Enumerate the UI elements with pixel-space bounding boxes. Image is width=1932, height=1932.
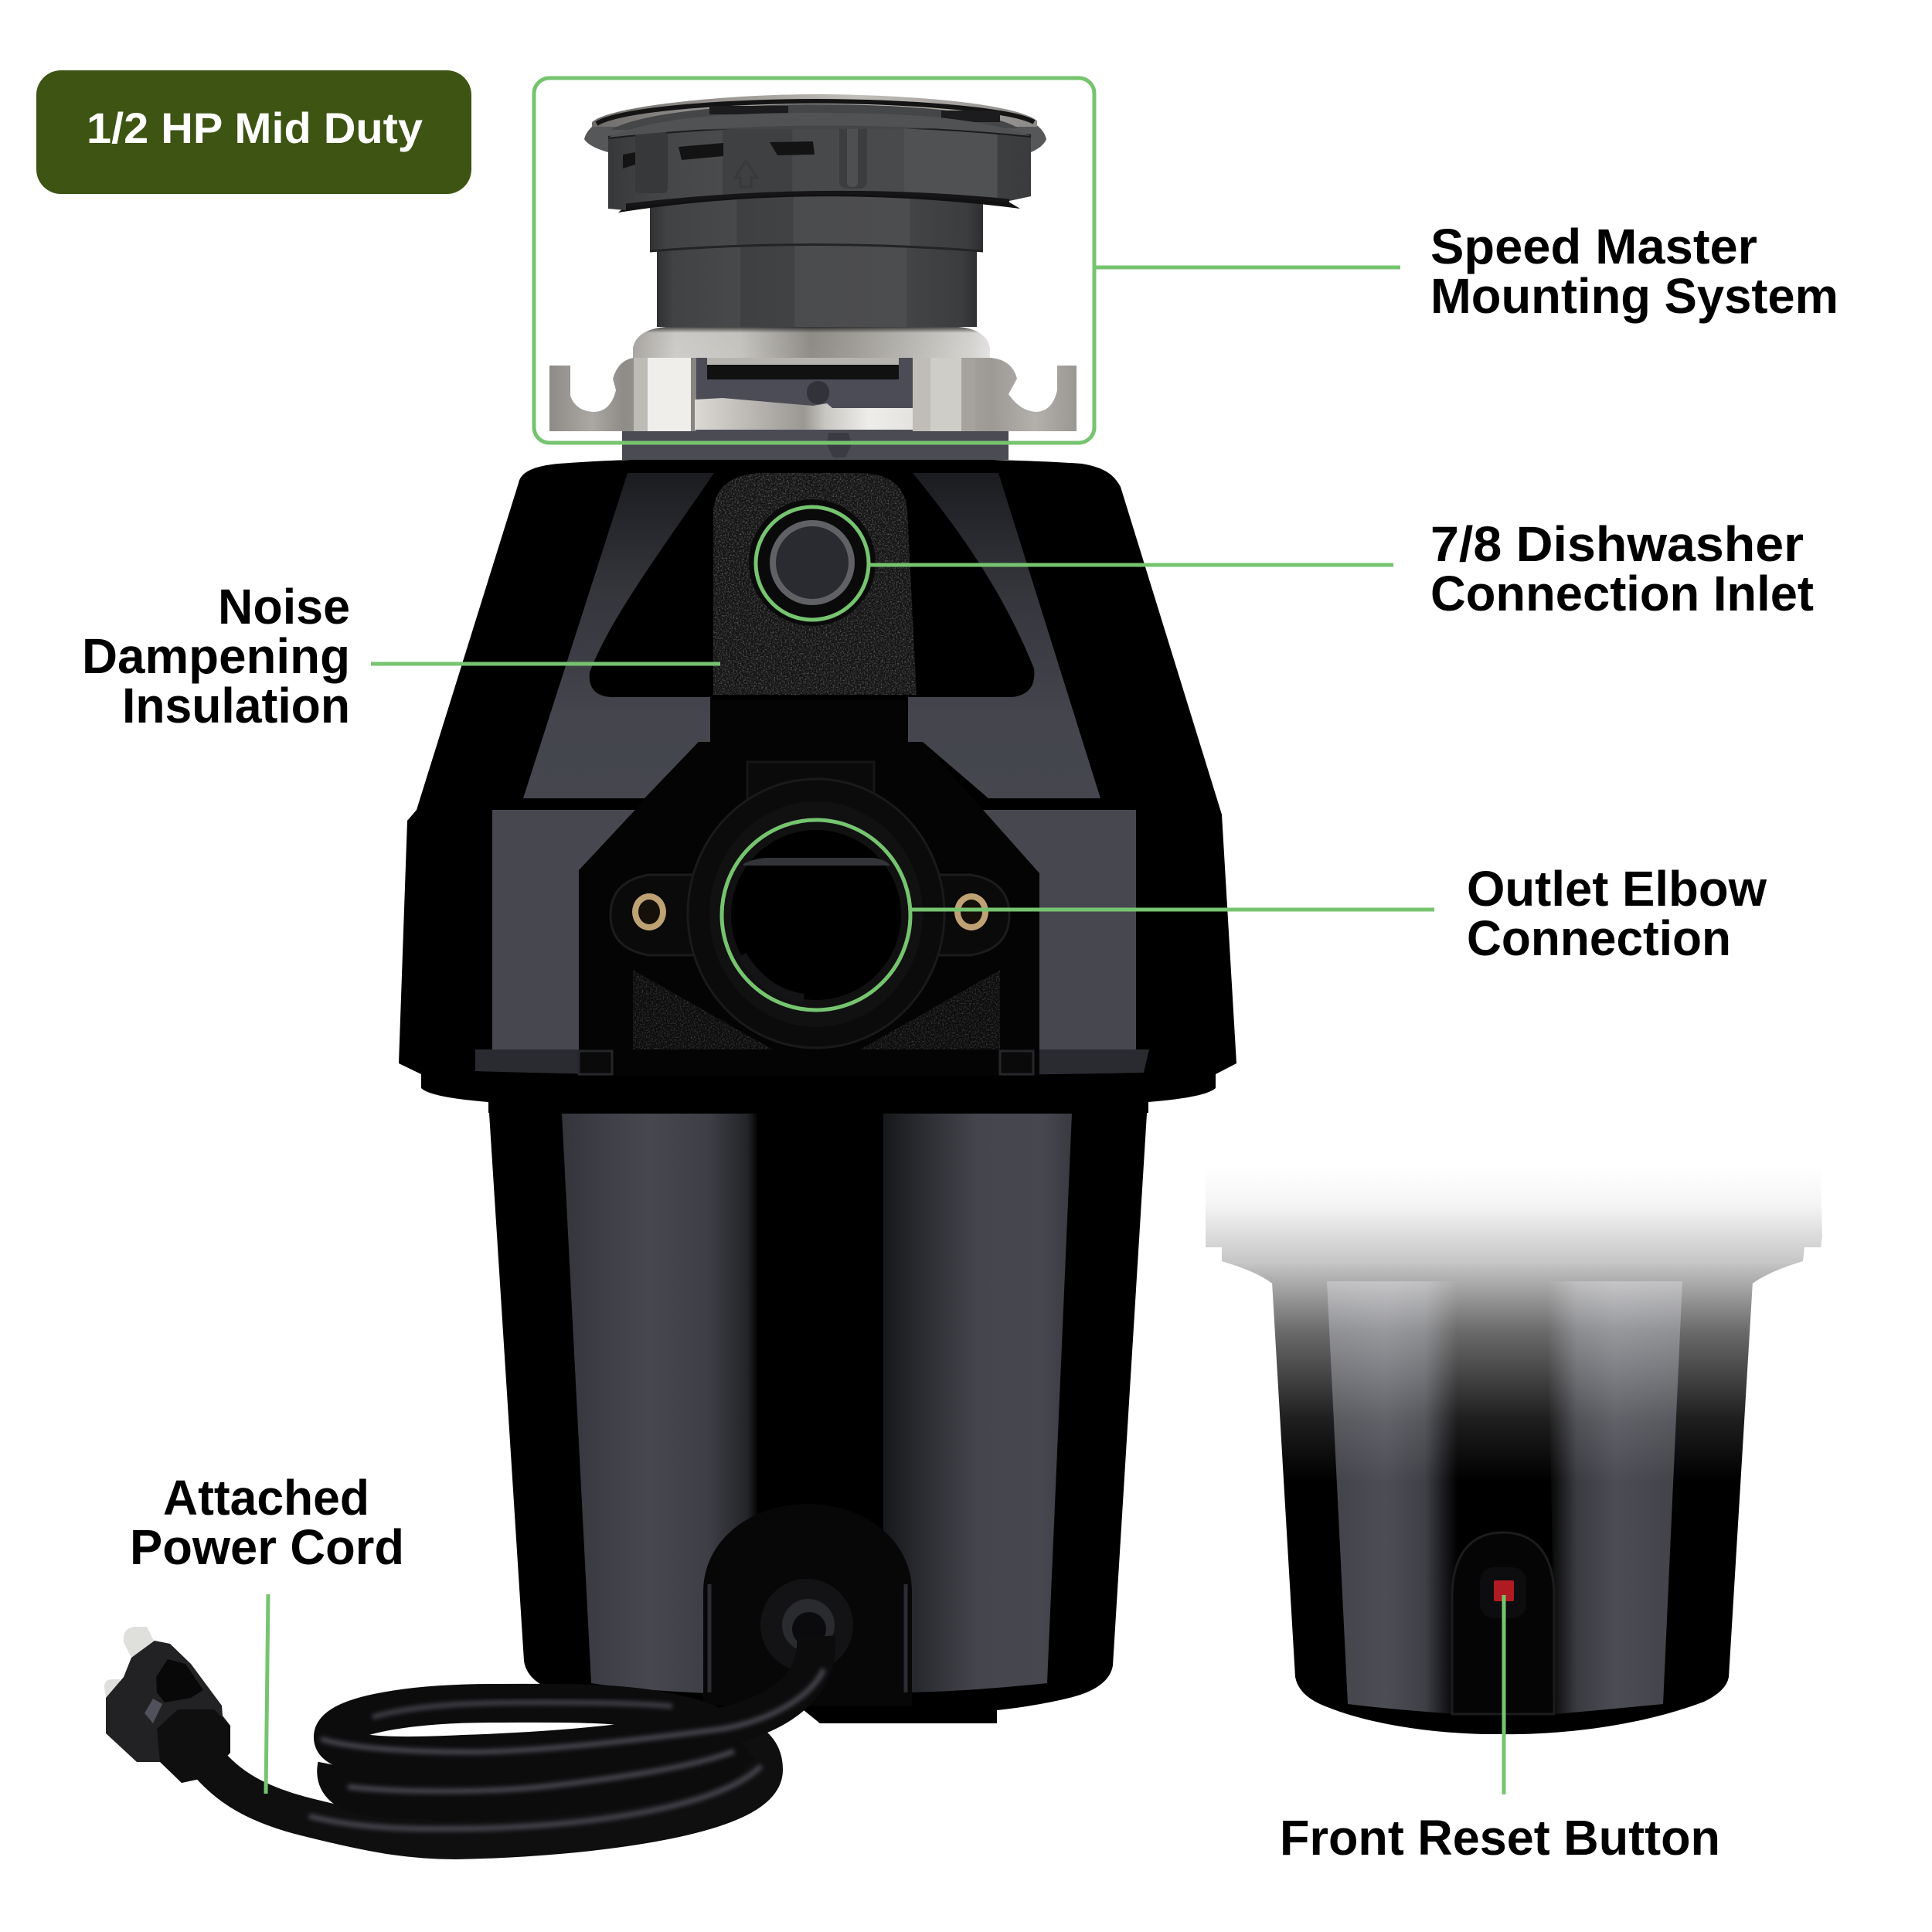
flange ring xyxy=(688,779,944,1048)
leader line: dishwasher inlet xyxy=(869,563,1393,567)
silver dome xyxy=(633,327,990,367)
under-ring shadow xyxy=(618,192,1020,213)
middle coil xyxy=(338,1743,742,1798)
label: Outlet Elbow Connection: Connection xyxy=(1467,910,1731,966)
prongs xyxy=(104,1627,155,1700)
ribs xyxy=(635,131,668,193)
label: Outlet Elbow Connection: Outlet Elbow xyxy=(1467,861,1767,917)
label: Noise Dampening Insulation xyxy=(82,579,350,733)
ring body xyxy=(608,122,1031,210)
plug xyxy=(104,1627,230,1783)
reset button xyxy=(1480,1567,1526,1618)
slots xyxy=(623,141,815,168)
leader line: outlet elbow xyxy=(910,907,1434,912)
gray panels xyxy=(523,473,714,798)
brass insert right xyxy=(954,893,988,930)
upper coil xyxy=(321,1637,824,1756)
inset highlights xyxy=(1327,1281,1458,1714)
plug hollow xyxy=(156,1659,203,1702)
white fade overlay xyxy=(1190,1167,1832,1482)
inset: front reset view xyxy=(1190,1167,1832,1734)
label: 7/8 Dishwasher Connection Inlet: 7/8 Dishwasher xyxy=(1430,516,1804,572)
outlet opening xyxy=(731,830,901,1000)
gray neck xyxy=(657,232,977,327)
recess: cord entry xyxy=(703,1504,912,1706)
outlet flange xyxy=(611,762,1009,1048)
foam insulation column xyxy=(713,473,917,695)
left ear xyxy=(611,875,719,955)
label: Front Reset Button: Front Reset Button xyxy=(1280,1810,1720,1866)
inset top band xyxy=(1206,1168,1822,1283)
label: Noise Dampening Insulation: Noise xyxy=(218,579,350,634)
right column xyxy=(913,358,930,431)
label: Outlet Elbow Connection xyxy=(1467,861,1767,966)
solid core between coil strands xyxy=(328,1727,765,1828)
upper neck xyxy=(650,185,983,251)
flange neck xyxy=(747,762,874,819)
callout ring: dishwasher inlet xyxy=(756,507,869,620)
brass insert left xyxy=(632,893,666,930)
leader line: reset button xyxy=(1502,1595,1505,1794)
silver base with hooks xyxy=(549,358,1077,431)
latch bar xyxy=(695,398,913,430)
plug head xyxy=(106,1641,230,1783)
label: Speed Master Mounting System: Speed Master xyxy=(1430,219,1757,274)
label: Attached Power Cord: Attached xyxy=(163,1470,369,1526)
right ear xyxy=(904,875,1009,955)
label: Noise Dampening Insulation: Dampening xyxy=(82,628,350,684)
outer coil xyxy=(193,1739,764,1840)
inset cup xyxy=(1271,1269,1753,1734)
rim xyxy=(592,94,1037,138)
leader line: noise insulation xyxy=(371,662,720,666)
lower band xyxy=(492,810,1136,1049)
dishwasher inlet xyxy=(749,499,876,626)
dark hexagon recess xyxy=(579,742,1039,1076)
strain relief collar xyxy=(157,1709,230,1783)
clips at bottom edge xyxy=(579,1051,1033,1074)
callout box: mounting system xyxy=(534,78,1094,443)
power cord xyxy=(193,1637,824,1840)
left column xyxy=(634,358,648,431)
inset recess xyxy=(1452,1532,1554,1714)
upper housing of main disposer xyxy=(399,457,1236,1113)
speckled foam near outlet xyxy=(633,970,1000,1049)
cup: lower housing of main disposer xyxy=(488,1101,1148,1723)
arrow emboss xyxy=(735,161,757,187)
lower gray cylinder xyxy=(622,429,1009,460)
leader line: power cord xyxy=(266,1594,268,1794)
latch window xyxy=(695,358,913,431)
label: Attached Power Cord: Power Cord xyxy=(130,1519,404,1575)
label: 7/8 Dishwasher Connection Inlet xyxy=(1430,516,1814,621)
label: Attached Power Cord xyxy=(130,1470,404,1575)
strap below foam xyxy=(710,700,908,743)
label: Noise Dampening Insulation: Insulation xyxy=(122,678,350,733)
mounting system xyxy=(549,94,1077,460)
label: Speed Master Mounting System xyxy=(1430,219,1838,324)
leader line: mounting system xyxy=(1094,266,1400,269)
upper shell xyxy=(399,457,1236,1113)
plug highlight xyxy=(145,1699,162,1723)
label: 7/8 Dishwasher Connection Inlet: Connection Inlet xyxy=(1430,566,1814,621)
badge: 1/2 HP Mid Duty xyxy=(36,70,471,194)
label: Speed Master Mounting System: Mounting System xyxy=(1430,268,1838,324)
badge: 1/2 HP Mid Duty: 1/2 HP Mid Duty xyxy=(87,104,423,152)
callout ring: outlet elbow xyxy=(722,820,910,1010)
flange lip xyxy=(584,116,1046,152)
